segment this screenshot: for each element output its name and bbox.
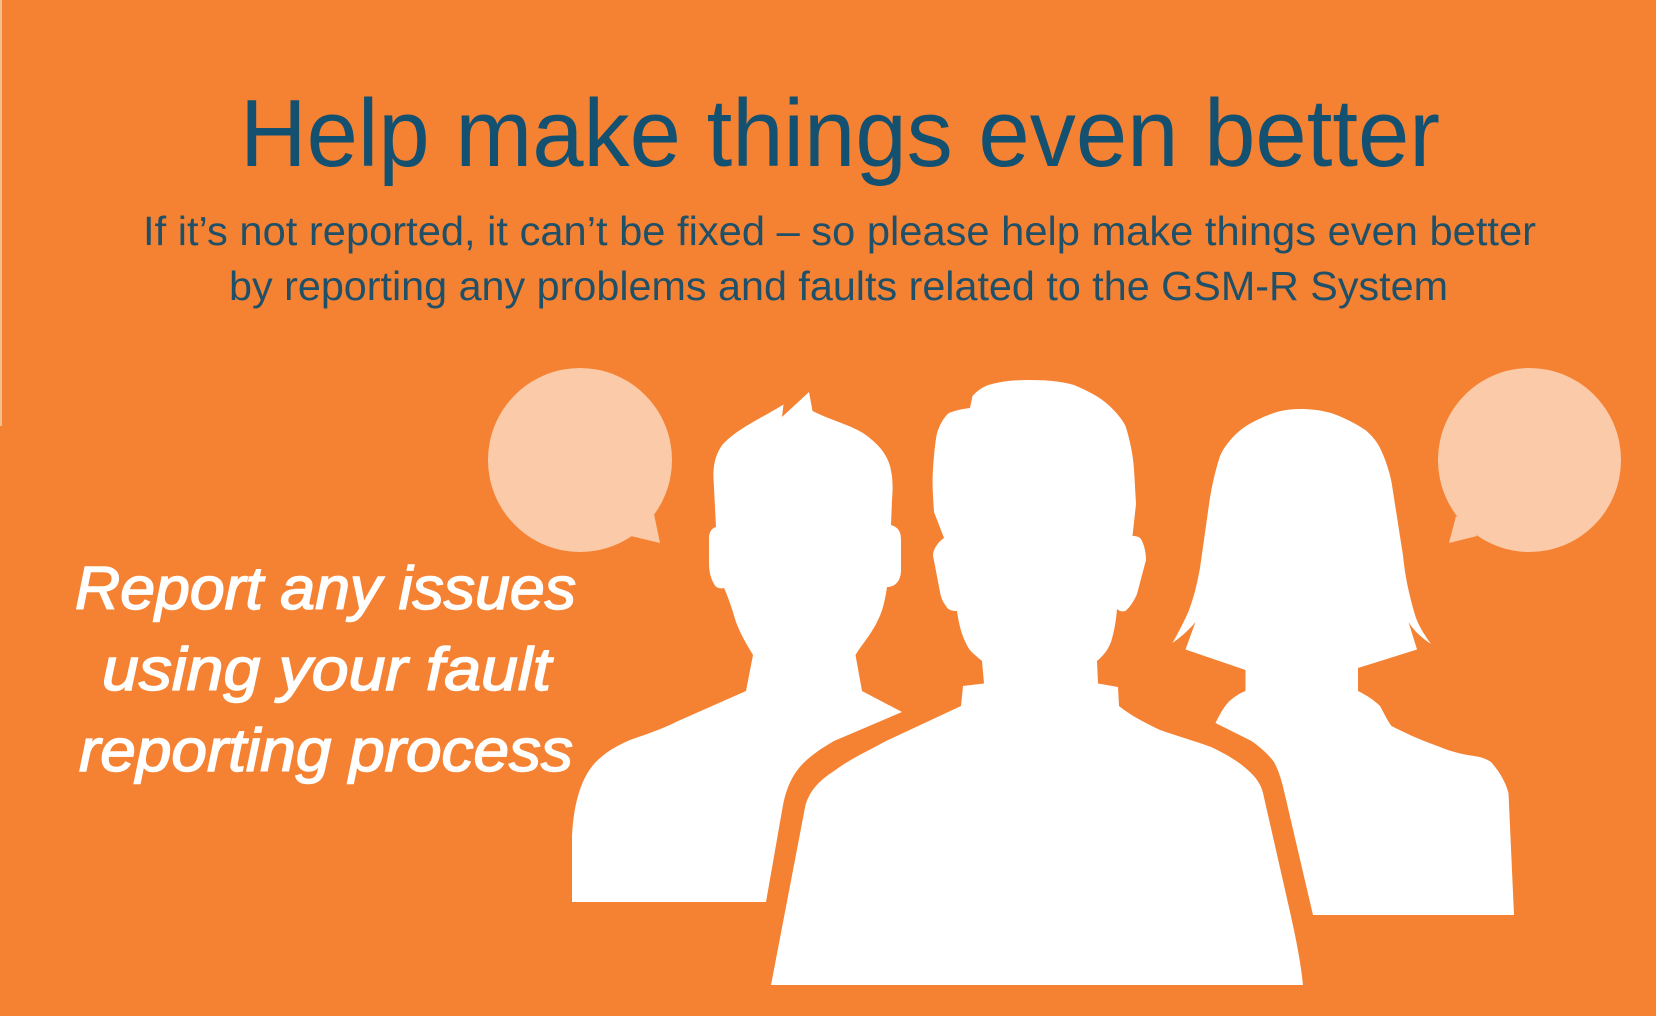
callout: report any issues: reporting process	[79, 717, 573, 784]
icon: right person silhouette	[1172, 409, 1514, 915]
callout: report any issues	[75, 555, 576, 784]
callout: report any issues: Report any issues	[75, 555, 576, 622]
title: Help make things even better	[240, 80, 1440, 187]
subtitle text block: by reporting any problems and faults related to the GSM-R System	[229, 263, 1448, 309]
callout: report any issues: using your fault	[102, 636, 554, 703]
icon: left speech bubble	[488, 368, 672, 552]
subtitle text block: If it’s not reported, it can’t be fixed – so please help make things even better	[143, 208, 1536, 254]
subtitle text block	[143, 208, 1536, 309]
icon: left person silhouette	[572, 392, 902, 902]
icon: centre person silhouette	[771, 380, 1303, 985]
icon: right speech bubble	[1438, 368, 1621, 552]
